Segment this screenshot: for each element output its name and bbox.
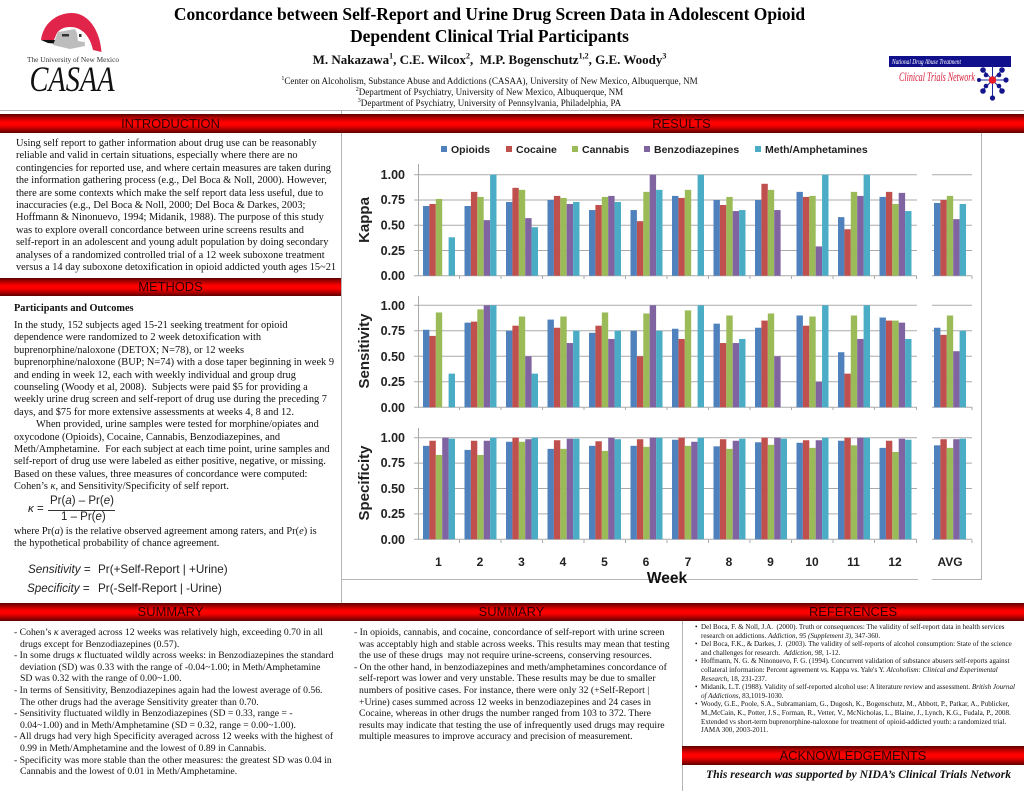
text block: references: • Del Boca, F. & Noll, J.A. (2000). Truth or consequences: The validity of self-report data in health services bbox=[695, 623, 1005, 631]
text block: introduction: self-report in an adolescent and young adult population by doing secondary bbox=[16, 237, 328, 248]
chart: Kappa: 0.00 bbox=[381, 269, 405, 283]
heading: methods bbox=[0, 278, 341, 296]
legend bbox=[441, 144, 868, 156]
text block: references: of Addictions, 83,1019-1030. bbox=[701, 692, 783, 700]
text block: introduction: Using self report to gather information about drug use can be reasonably bbox=[16, 138, 317, 149]
text block: summary middle: numbers of positive cases. For instance, there were only 32 (+Self-Report | bbox=[359, 685, 649, 696]
chart: Sensitivity: 0.25 bbox=[381, 375, 405, 389]
formula: kappa: Pr(a) – Pr(e) bbox=[50, 495, 114, 507]
x axis labels bbox=[435, 555, 963, 569]
heading: introduction and results band: INTRODUCTION bbox=[121, 116, 220, 131]
legend: Benzodiazepines bbox=[654, 144, 739, 156]
text block: methods: Based on these values, three measures of concordance were computed: bbox=[14, 469, 307, 480]
heading: participants and outcomes: Participants and Outcomes bbox=[14, 303, 134, 314]
text block: introduction: Hoffmann & Ninonuevo, 1994; Midanik, 1988). The purpose of this study bbox=[16, 212, 324, 223]
chart panel: results bbox=[356, 144, 972, 587]
text block: summary middle: Cocaine, whereas in other drugs the number ranged from 103 to 372. There bbox=[359, 708, 651, 719]
text block: references: JAMA 300, 2003-2011. bbox=[701, 726, 768, 734]
formula: sensitivity bbox=[28, 563, 228, 576]
text block: introduction: versus a 14 day suboxone detoxification in opioid addicted youth ages 15~21 bbox=[16, 262, 336, 273]
text block: summary middle: was acceptably high and stable across weeks. This results may mean that testing bbox=[359, 639, 670, 650]
text block: references: • Woody, G.E., Poole, S.A., Subramaniam, G., Dugosh, K., Bogenschutz, M., Abbott, P., Patkar, A., Publicker, bbox=[695, 700, 1009, 708]
heading: summary and references band: SUMMARY bbox=[479, 604, 544, 619]
text block: references: and challenges for research. Addiction, 98, 1-12. bbox=[701, 649, 840, 657]
text block: methods: weekly urine drug screen and self-report of drug use during the preceding 7 bbox=[14, 394, 327, 405]
affiliations: 3Department of Psychiatry, University of Pennsylvania, Philadelphia, PA bbox=[358, 98, 621, 108]
chart: Sensitivity: 0.50 bbox=[381, 350, 405, 364]
text block: introduction: there are some contexts which make the self report data less useful, due to bbox=[16, 188, 323, 199]
affiliations: 2Department of Psychiatry, University of New Mexico, Albuquerque, NM bbox=[356, 87, 623, 97]
logo: Clinical Trials Network bbox=[889, 56, 1011, 101]
heading: introduction and results band bbox=[0, 114, 1024, 133]
formula: sensitivity: Sensitivity = bbox=[28, 563, 91, 576]
text block: references: Extended vs short-term buprenorphine-naloxone for treatment of opioid-addicted youth: a randomized trial. bbox=[701, 718, 1006, 726]
text block: methods: buprenorphine/naloxone (DETOX; N=78), or 12 weeks bbox=[14, 345, 244, 356]
text block: summary left: - All drugs had very high Specificity averaged across 12 weeks with the highest of bbox=[14, 731, 333, 742]
text block: introduction: the information gathering process (e.g., Del Boca & Noll, 2000). However, bbox=[16, 175, 327, 186]
x axis labels: 12 bbox=[888, 555, 902, 569]
chart: Kappa: 0.50 bbox=[381, 218, 405, 232]
text block: summary middle: - In opioids, cannabis, and cocaine, concordance of self-report with urine screen bbox=[354, 627, 664, 638]
affiliations: 1Center on Alcoholism, Substance Abuse and Addictions (CASAA), University of New Mexico, Albuquerque, NM bbox=[281, 76, 698, 86]
text block: methods: In the study, 152 subjects aged 15-21 seeking treatment for opioid bbox=[14, 320, 288, 331]
formula: sensitivity: Pr(+Self-Report | +Urine) bbox=[98, 563, 228, 576]
text block: summary middle: multiple measures to improve accuracy and precision of measurement. bbox=[359, 731, 633, 742]
chart: Kappa: 1.00 bbox=[381, 168, 405, 182]
logo: University of New Mexico CASAA bbox=[27, 13, 119, 98]
text block: summary middle: self-report was lower and very unstable. These results may be due to smaller bbox=[359, 673, 656, 684]
text block: methods: dependence were randomized to 2 week detoxification with bbox=[14, 332, 261, 343]
logo: Clinical Trials Network: National Drug Abuse Treatment bbox=[891, 58, 962, 66]
chart: Specificity: Specificity bbox=[356, 445, 373, 521]
legend: Opioids bbox=[451, 144, 490, 156]
text block: acknowledgement: This research was supported by NIDA’s Clinical Trials Network bbox=[706, 768, 1011, 781]
formula: specificity bbox=[27, 582, 222, 595]
chart: Sensitivity: Sensitivity bbox=[356, 313, 373, 389]
text block: summary middle: the use of these drugs may not require urine-screens, conserving resources. bbox=[359, 650, 652, 661]
text block: summary left: 0.99 in Meth/Amphetamine and the lowest of 0.89 in Cannabis. bbox=[20, 743, 266, 754]
heading: summary and references band: SUMMARY bbox=[138, 604, 203, 619]
text block: summary left: SD was 0.32 with the range of 0.00~1.00. bbox=[20, 673, 182, 684]
text block: introduction bbox=[16, 138, 336, 273]
x axis labels: 4 bbox=[560, 555, 567, 569]
heading: summary and references band: REFERENCES bbox=[809, 604, 897, 619]
chart: Specificity: 0.25 bbox=[381, 507, 405, 521]
chart: Sensitivity bbox=[356, 296, 972, 415]
x axis labels: 11 bbox=[847, 555, 860, 569]
formula: kappa bbox=[28, 495, 115, 523]
text block: summary left: Cannabis and the lowest of 0.01 in Meth/Amphetamine. bbox=[20, 766, 237, 777]
legend: Meth/Amphetamines bbox=[765, 144, 868, 156]
text block: formula explanation: where Pr(a) is the relative observed agreement among raters, and Pr(e) is bbox=[14, 526, 317, 537]
text block: introduction: contingencies for reported use, and where certain measures are taken during bbox=[16, 163, 331, 174]
heading: introduction and results band: RESULTS bbox=[652, 116, 711, 131]
chart: Sensitivity: 0.00 bbox=[381, 401, 405, 415]
x axis labels: AVG bbox=[937, 555, 963, 569]
x axis labels: 5 bbox=[601, 555, 608, 569]
text block: methods bbox=[14, 320, 334, 492]
heading: methods: METHODS bbox=[138, 279, 203, 294]
heading: acknowledgements bbox=[682, 746, 1024, 765]
title bbox=[174, 4, 805, 46]
text block: summary middle: +Urine) cases summed across 12 weeks in benzodiazepines and 24 cases in bbox=[359, 697, 651, 708]
title: Dependent Clinical Trial Participants bbox=[350, 26, 629, 46]
text block: methods: When provided, urine samples were tested for morphine/opiates and bbox=[36, 419, 319, 430]
text block: introduction: analyses of a randomized controlled trial of a 12 week suboxone treatment bbox=[16, 250, 325, 261]
title: Concordance between Self-Report and Urine Drug Screen Data in Adolescent Opioid bbox=[174, 4, 805, 24]
text block: methods: Cohen’s κ, and Sensitivity/Specificity of self report. bbox=[14, 481, 229, 492]
x axis labels: 7 bbox=[685, 555, 692, 569]
x axis labels: 6 bbox=[643, 555, 650, 569]
logo: University of New Mexico CASAA: The University of New Mexico bbox=[27, 55, 119, 64]
formula: specificity: Specificity = bbox=[27, 582, 90, 595]
text block: methods: and ending in week 12, each with weekly individual and group drug bbox=[14, 370, 296, 381]
formula: kappa: κ = bbox=[28, 503, 44, 515]
text block: summary left: deviation (SD) was 0.33 with the range of -0.04~1.00; in Meth/Amphetamine bbox=[20, 662, 320, 673]
heading: acknowledgements: ACKNOWLEDGEMENTS bbox=[780, 748, 926, 763]
text block: summary left: - Specificity was more stable than the other measures: the greatest SD was 0.04 in bbox=[14, 755, 332, 766]
text block: references: • Hoffmann, N. G. & Ninonuevo, F. G. (1994). Concurrent validation of substance abusers self-reports against bbox=[695, 657, 1009, 665]
chart: Specificity: 0.50 bbox=[381, 482, 405, 496]
text block: methods: self-report of drug use were labeled as either positive, negative, or missing. bbox=[14, 456, 326, 467]
text block: references: • Midanik, L.T. (1988). Validity of self-reported alcohol use: A literature review and assessment. British Journal bbox=[695, 683, 1015, 691]
text block: summary left: The other drugs had the average Sensitivity greater than 0.70. bbox=[20, 697, 259, 708]
text block: introduction: reliable and valid in certain situations, especially where there are no bbox=[16, 150, 298, 161]
text block: references: Research, 18, 231-237. bbox=[701, 675, 767, 683]
chart: Specificity: 0.00 bbox=[381, 533, 405, 547]
x axis labels: 3 bbox=[518, 555, 525, 569]
text block: methods: buprenorphine/naloxone (BUP; N=74) with a dose taper beginning in week 9 bbox=[14, 357, 334, 368]
chart: Specificity: 1.00 bbox=[381, 431, 405, 445]
text block: summary middle: results may indicate that testing the use of infrequently used drugs may require bbox=[359, 720, 665, 731]
legend: Cocaine bbox=[516, 144, 557, 156]
text block: summary left bbox=[14, 627, 334, 777]
x axis labels: 1 bbox=[435, 555, 442, 569]
text block: references: collateral information: Percent agreement vs. Kappa vs. Yale's Y. Alcoholism: Clinical and Experimental bbox=[701, 666, 998, 674]
x axis labels: 2 bbox=[477, 555, 484, 569]
heading: summary and references band bbox=[0, 603, 1024, 621]
text block: formula explanation: the hypothetical probability of chance agreement. bbox=[14, 538, 219, 549]
text block: references bbox=[695, 623, 1015, 734]
chart: Kappa bbox=[356, 164, 972, 283]
text block: summary left: - In some drugs κ fluctuated wildly across weeks: in Benzodiazepines the standard bbox=[14, 650, 333, 661]
text block: methods: days, and $75 for more extensive assessments at weeks 4, 8 and 12. bbox=[14, 407, 294, 418]
text block: summary left: - In terms of Sensitivity, Benzodiazepines again had the lowest average of 0.56. bbox=[14, 685, 322, 696]
x axis title: Week bbox=[647, 570, 687, 587]
authors: M. Nakazawa1, C.E. Wilcox2, M.P. Bogenschutz1,2, G.E. Woody3 bbox=[313, 52, 666, 67]
text block: methods: counseling (Woody et al, 2008). Subjects were paid $5 for providing a bbox=[14, 382, 308, 393]
text block: methods: Meth/Amphetamine. For each subject at each time point, urine samples and bbox=[14, 444, 330, 455]
text block: summary left: 0.04~1.00) and in Meth/Amphetamine (SD = 0.32, range = 0.00~1.00). bbox=[20, 720, 296, 731]
chart: Specificity: 0.75 bbox=[381, 456, 405, 470]
text block: formula explanation bbox=[14, 526, 317, 549]
chart: Sensitivity: 0.75 bbox=[381, 324, 405, 338]
x axis labels: 9 bbox=[767, 555, 774, 569]
text block: references: research on addictions. Addiction, 95 (Supplement 3), 347-360. bbox=[701, 632, 880, 640]
chart: Sensitivity: 1.00 bbox=[381, 299, 405, 313]
affiliations bbox=[281, 76, 698, 108]
text block: summary left: - Cohen’s κ averaged across 12 weeks was relatively high, exceeding 0.70 in all bbox=[14, 627, 323, 638]
text block: summary left: - Sensitivity fluctuated wildly in Benzodiazepines (SD = 0.33, range = - bbox=[14, 708, 293, 719]
text block: summary middle bbox=[354, 627, 670, 742]
text block: introduction: was to explore overall concordance between urine screens results and bbox=[16, 225, 304, 236]
legend: Cannabis bbox=[582, 144, 629, 156]
text block: introduction: inaccuracies (e.g., Del Boca & Noll, 2000; Del Boca & Darkes, 2003; bbox=[16, 200, 305, 211]
chart: Kappa: 0.75 bbox=[381, 193, 405, 207]
chart: Kappa: Kappa bbox=[356, 196, 373, 243]
text block: references: M.,McCain, K., Potter, J.S., Forman, R., Vetter, V., McNicholas, L., Blaine, J., Lynch, K.G., Fudala, P., 2008. bbox=[701, 709, 1011, 717]
chart: Specificity bbox=[356, 428, 972, 547]
text block: summary left: drugs except for Benzodiazepines (0.57). bbox=[20, 639, 179, 650]
formula: kappa: 1 – Pr(e) bbox=[61, 511, 106, 523]
x axis labels: 10 bbox=[805, 555, 819, 569]
x axis labels: 8 bbox=[726, 555, 733, 569]
text block: summary middle: - On the other hand, in benzodiazepines and meth/amphetamines concordance of bbox=[354, 662, 667, 673]
chart: Kappa: 0.25 bbox=[381, 244, 405, 258]
formula: specificity: Pr(-Self-Report | -Urine) bbox=[98, 582, 222, 595]
text block: methods: oxycodone (Opioids), Cocaine, Cannabis, Benzodiazepines, and bbox=[14, 432, 280, 443]
text block: references: • Del Boca, F.K., & Darkes, J. (2003). The validity of self-reports of alcohol consumption: State of the science bbox=[695, 640, 1012, 648]
